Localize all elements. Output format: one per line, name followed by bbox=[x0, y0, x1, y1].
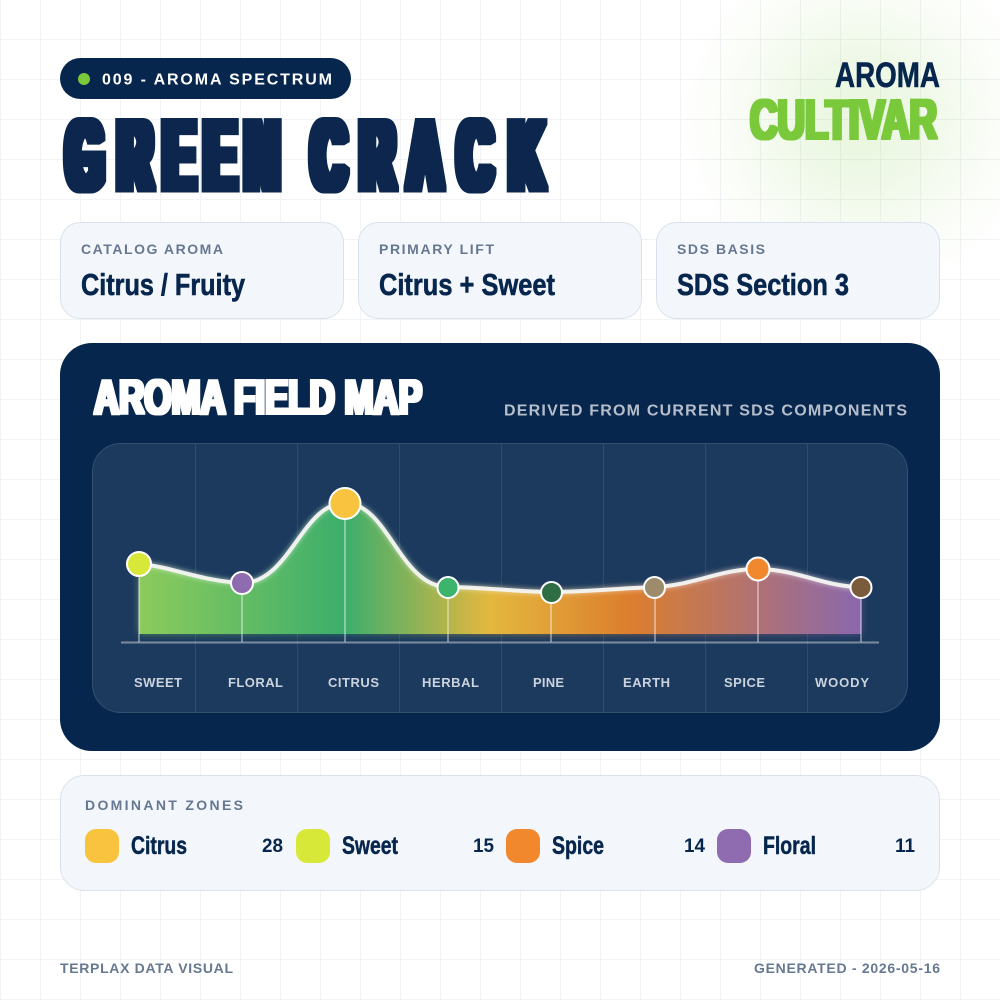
panel subtitle: DERIVED FROM CURRENT SDS COMPONENTS bbox=[504, 402, 907, 420]
badge: 009 aroma spectrum: 009 - AROMA SPECTRUM bbox=[102, 72, 332, 88]
zone: floral bbox=[717, 829, 915, 863]
point: floral bbox=[231, 572, 253, 594]
point: citrus bbox=[330, 488, 360, 519]
card: sds basis: SDS Section 3 bbox=[677, 267, 849, 302]
zone: sweet: Sweet bbox=[342, 832, 399, 860]
zone: citrus: Citrus bbox=[131, 832, 187, 860]
card: catalog aroma bbox=[60, 222, 344, 318]
brand: aroma cultivar: AROMA bbox=[835, 56, 940, 95]
chart: aroma curve bbox=[92, 444, 908, 712]
point: herbal bbox=[438, 577, 458, 598]
area glow bbox=[139, 503, 861, 634]
footer left: TERPLAX DATA VISUAL bbox=[60, 960, 233, 976]
zone: floral: Floral bbox=[763, 832, 816, 860]
card: primary lift: Citrus + Sweet bbox=[379, 267, 555, 302]
card: catalog aroma: CATALOG AROMA bbox=[81, 241, 223, 257]
badge: 009 aroma spectrum bbox=[60, 58, 351, 99]
zone: citrus: 28 bbox=[262, 836, 283, 857]
card: sds basis: SDS BASIS bbox=[677, 241, 765, 257]
zone: sweet bbox=[296, 829, 494, 863]
card: primary lift bbox=[358, 222, 642, 318]
card: primary lift: PRIMARY LIFT bbox=[379, 241, 494, 257]
panel: dominant zones bbox=[60, 776, 940, 890]
point: woody bbox=[850, 577, 872, 598]
axis labels: FLORAL bbox=[228, 675, 283, 690]
point: sweet bbox=[127, 552, 151, 576]
title: GREEN CRACK bbox=[67, 101, 543, 211]
corner glow bbox=[680, 0, 1000, 300]
zone: spice: 14 bbox=[684, 836, 705, 857]
zone: sweet: 15 bbox=[473, 836, 494, 857]
zone: spice bbox=[506, 829, 705, 863]
axis labels: CITRUS bbox=[328, 675, 379, 690]
axis labels: SPICE bbox=[724, 675, 765, 690]
zone: citrus bbox=[85, 829, 283, 863]
footer right: GENERATED - 2026-05-16 bbox=[754, 960, 940, 976]
curve line bbox=[139, 503, 861, 592]
drop lines bbox=[139, 503, 861, 642]
point: pine bbox=[541, 582, 562, 603]
card: sds basis bbox=[656, 222, 940, 318]
panel: aroma field map bbox=[60, 343, 940, 751]
axis labels: SWEET bbox=[134, 675, 182, 690]
zones heading: DOMINANT ZONES bbox=[85, 797, 243, 813]
panel heading: AROMA FIELD MAP bbox=[94, 371, 422, 425]
axis labels: HERBAL bbox=[422, 675, 479, 690]
zone: floral: 11 bbox=[895, 836, 915, 857]
card: catalog aroma: Citrus / Fruity bbox=[81, 267, 246, 302]
axis labels bbox=[134, 675, 869, 690]
axis bbox=[121, 642, 879, 644]
area fill bbox=[139, 503, 861, 634]
brand: aroma cultivar bbox=[750, 56, 940, 152]
point: earth bbox=[644, 577, 665, 598]
axis labels: EARTH bbox=[623, 675, 670, 690]
point: spice bbox=[746, 558, 770, 580]
curve glow bbox=[139, 503, 861, 592]
axis labels: PINE bbox=[533, 675, 564, 690]
axis labels: WOODY bbox=[815, 675, 869, 690]
zone: spice: Spice bbox=[552, 832, 604, 860]
